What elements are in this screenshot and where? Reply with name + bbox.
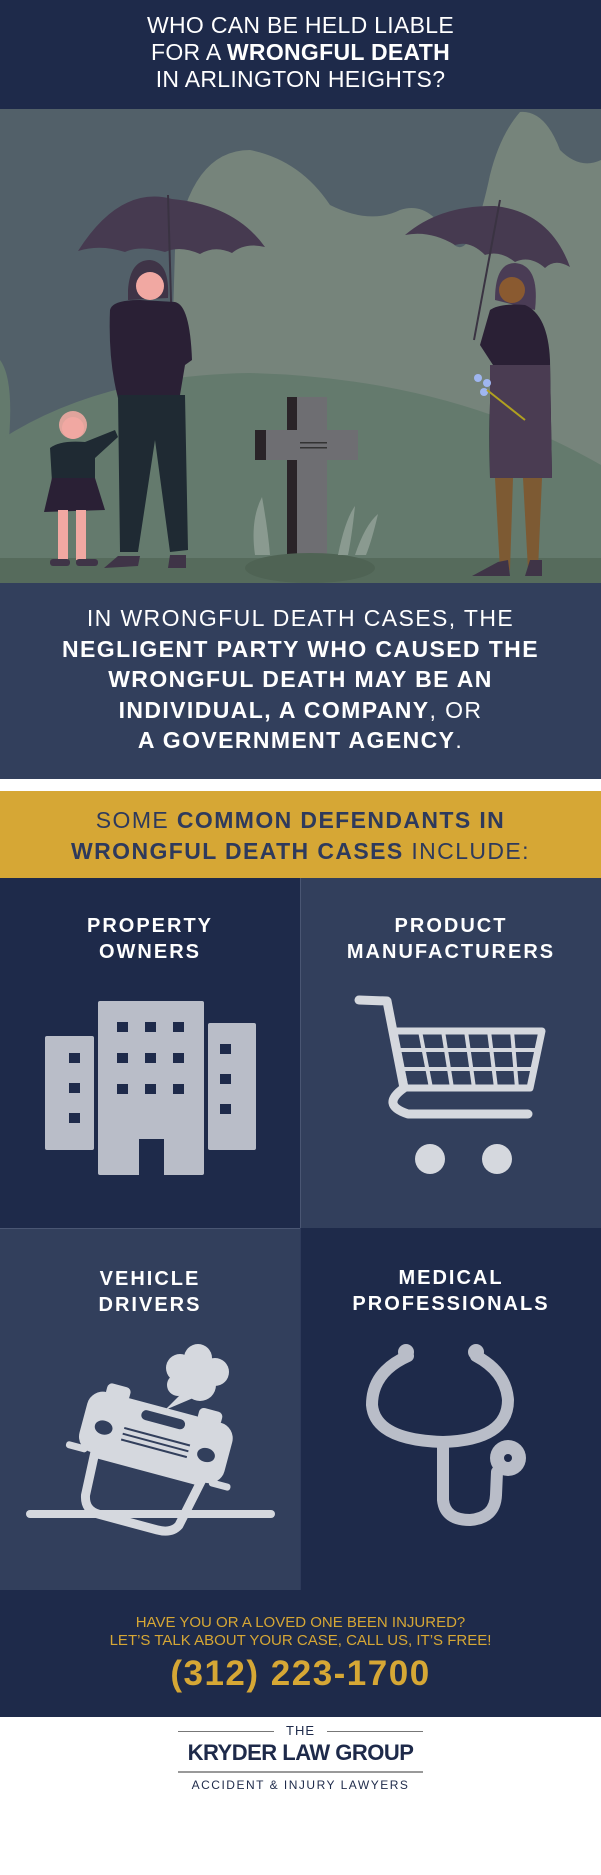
woman with flowers and umbrella [405,200,570,576]
call to action [0,1590,601,1717]
child [44,411,118,566]
label [87,915,213,963]
statement text: WRONGFUL DEATH MAY BE AN [108,666,493,692]
defendants heading: SOME COMMON DEFENDANTS IN [96,807,505,833]
icon: buildings [45,1001,256,1175]
statement text: NEGLIGENT PARTY WHO CAUSED THE [62,636,539,662]
icon: stethoscope [366,1344,526,1526]
title: WHO CAN BE HELD LIABLE [147,12,454,38]
cta text: LET’S TALK ABOUT YOUR CASE, CALL US, IT’S FREE! [110,1632,491,1649]
label: MEDICAL [398,1267,504,1289]
statement text: IN WRONGFUL DEATH CASES, THE [87,605,514,631]
mother with umbrella [78,195,265,568]
label: MANUFACTURERS [347,941,555,963]
label: VEHICLE [100,1268,200,1290]
title [147,12,454,92]
panel: product manufacturers [300,878,601,1228]
statement text: INDIVIDUAL, A COMPANY, OR [119,696,482,722]
panel: property owners [0,878,300,1228]
title: FOR A WRONGFUL DEATH [151,39,450,65]
label [99,1268,201,1316]
gold heading band [0,791,601,878]
title: IN ARLINGTON HEIGHTS? [156,66,445,92]
label: PROFESSIONALS [352,1293,550,1315]
illustration: funeral scene [0,109,601,583]
label [352,1267,550,1315]
label: PRODUCT [395,915,507,937]
statement panel [0,583,601,779]
logo: KRYDER LAW GROUP [188,1740,413,1765]
label: DRIVERS [99,1294,201,1316]
icon: shopping cart [354,996,546,1174]
logo [178,1723,423,1792]
icon: overturned car [26,1344,275,1536]
logo: ACCIDENT & INJURY LAWYERS [192,1778,409,1792]
cta text [110,1614,491,1649]
statement text: A GOVERNMENT AGENCY. [138,727,463,753]
header [0,0,601,109]
cta text: HAVE YOU OR A LOVED ONE BEEN INJURED? [136,1614,465,1631]
defendants heading: WRONGFUL DEATH CASES INCLUDE: [71,838,530,864]
panel: medical professionals [300,1228,601,1590]
defendants heading [71,807,530,864]
phone number: (312) 223-1700 [170,1654,431,1693]
cross gravestone [245,397,378,583]
statement text [62,605,539,753]
label: OWNERS [99,941,201,963]
label [347,915,555,963]
panel: vehicle drivers [0,1228,300,1590]
logo: THE [286,1723,315,1738]
label: PROPERTY [87,915,213,937]
